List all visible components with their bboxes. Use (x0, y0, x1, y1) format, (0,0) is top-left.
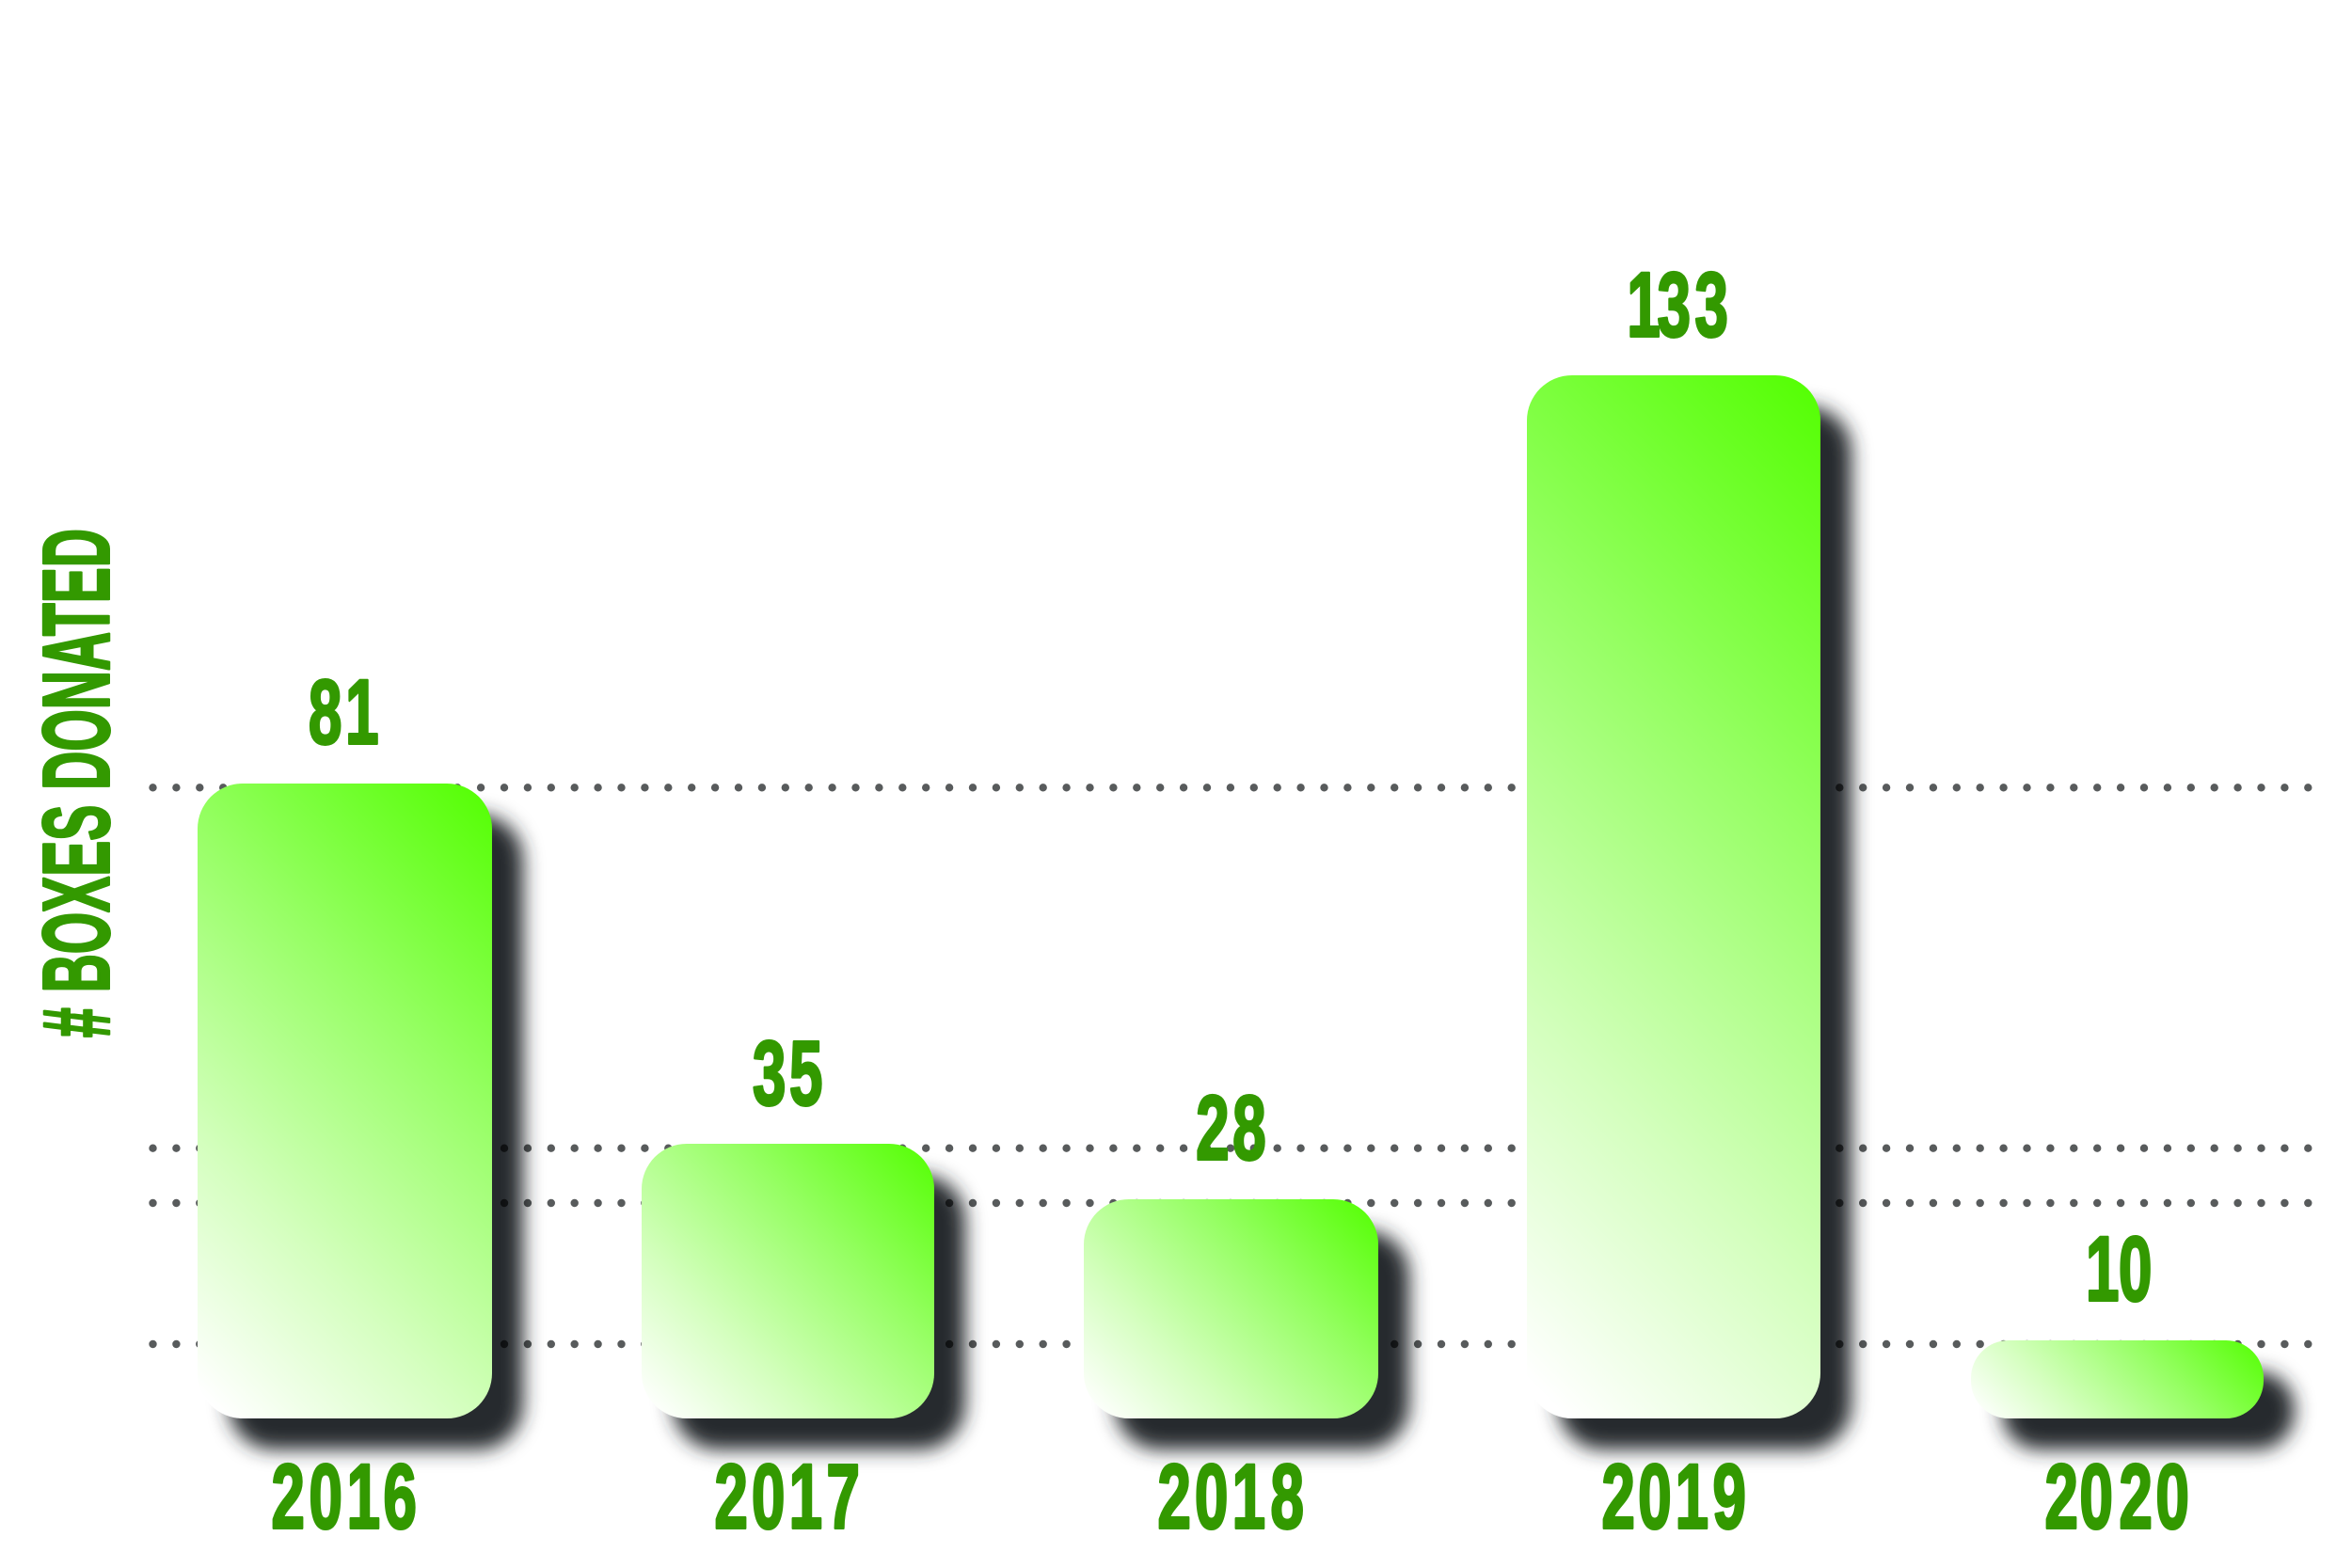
bar 2019 (1527, 375, 1820, 1418)
bar 2020 (1971, 1340, 2264, 1418)
year labels (271, 1447, 2189, 1548)
bar 2017 (642, 1144, 934, 1418)
value 2016: 81 (309, 662, 379, 764)
bar 2016 (198, 784, 492, 1418)
y axis title: # BOXES DONATED (24, 529, 130, 1037)
bar shadows (229, 406, 2295, 1449)
value 2017: 35 (753, 1023, 822, 1125)
year 2019: 2019 (1601, 1447, 1746, 1548)
value 2019: 133 (1627, 255, 1728, 356)
year 2018: 2018 (1157, 1447, 1304, 1548)
year 2017: 2017 (714, 1447, 860, 1548)
bar 2018 (1084, 1199, 1378, 1418)
year 2020: 2020 (2044, 1447, 2189, 1548)
value labels (309, 255, 2153, 1321)
year 2016: 2016 (271, 1447, 417, 1548)
value 2018: 28 (1196, 1078, 1266, 1180)
value 2020: 10 (2086, 1219, 2153, 1321)
